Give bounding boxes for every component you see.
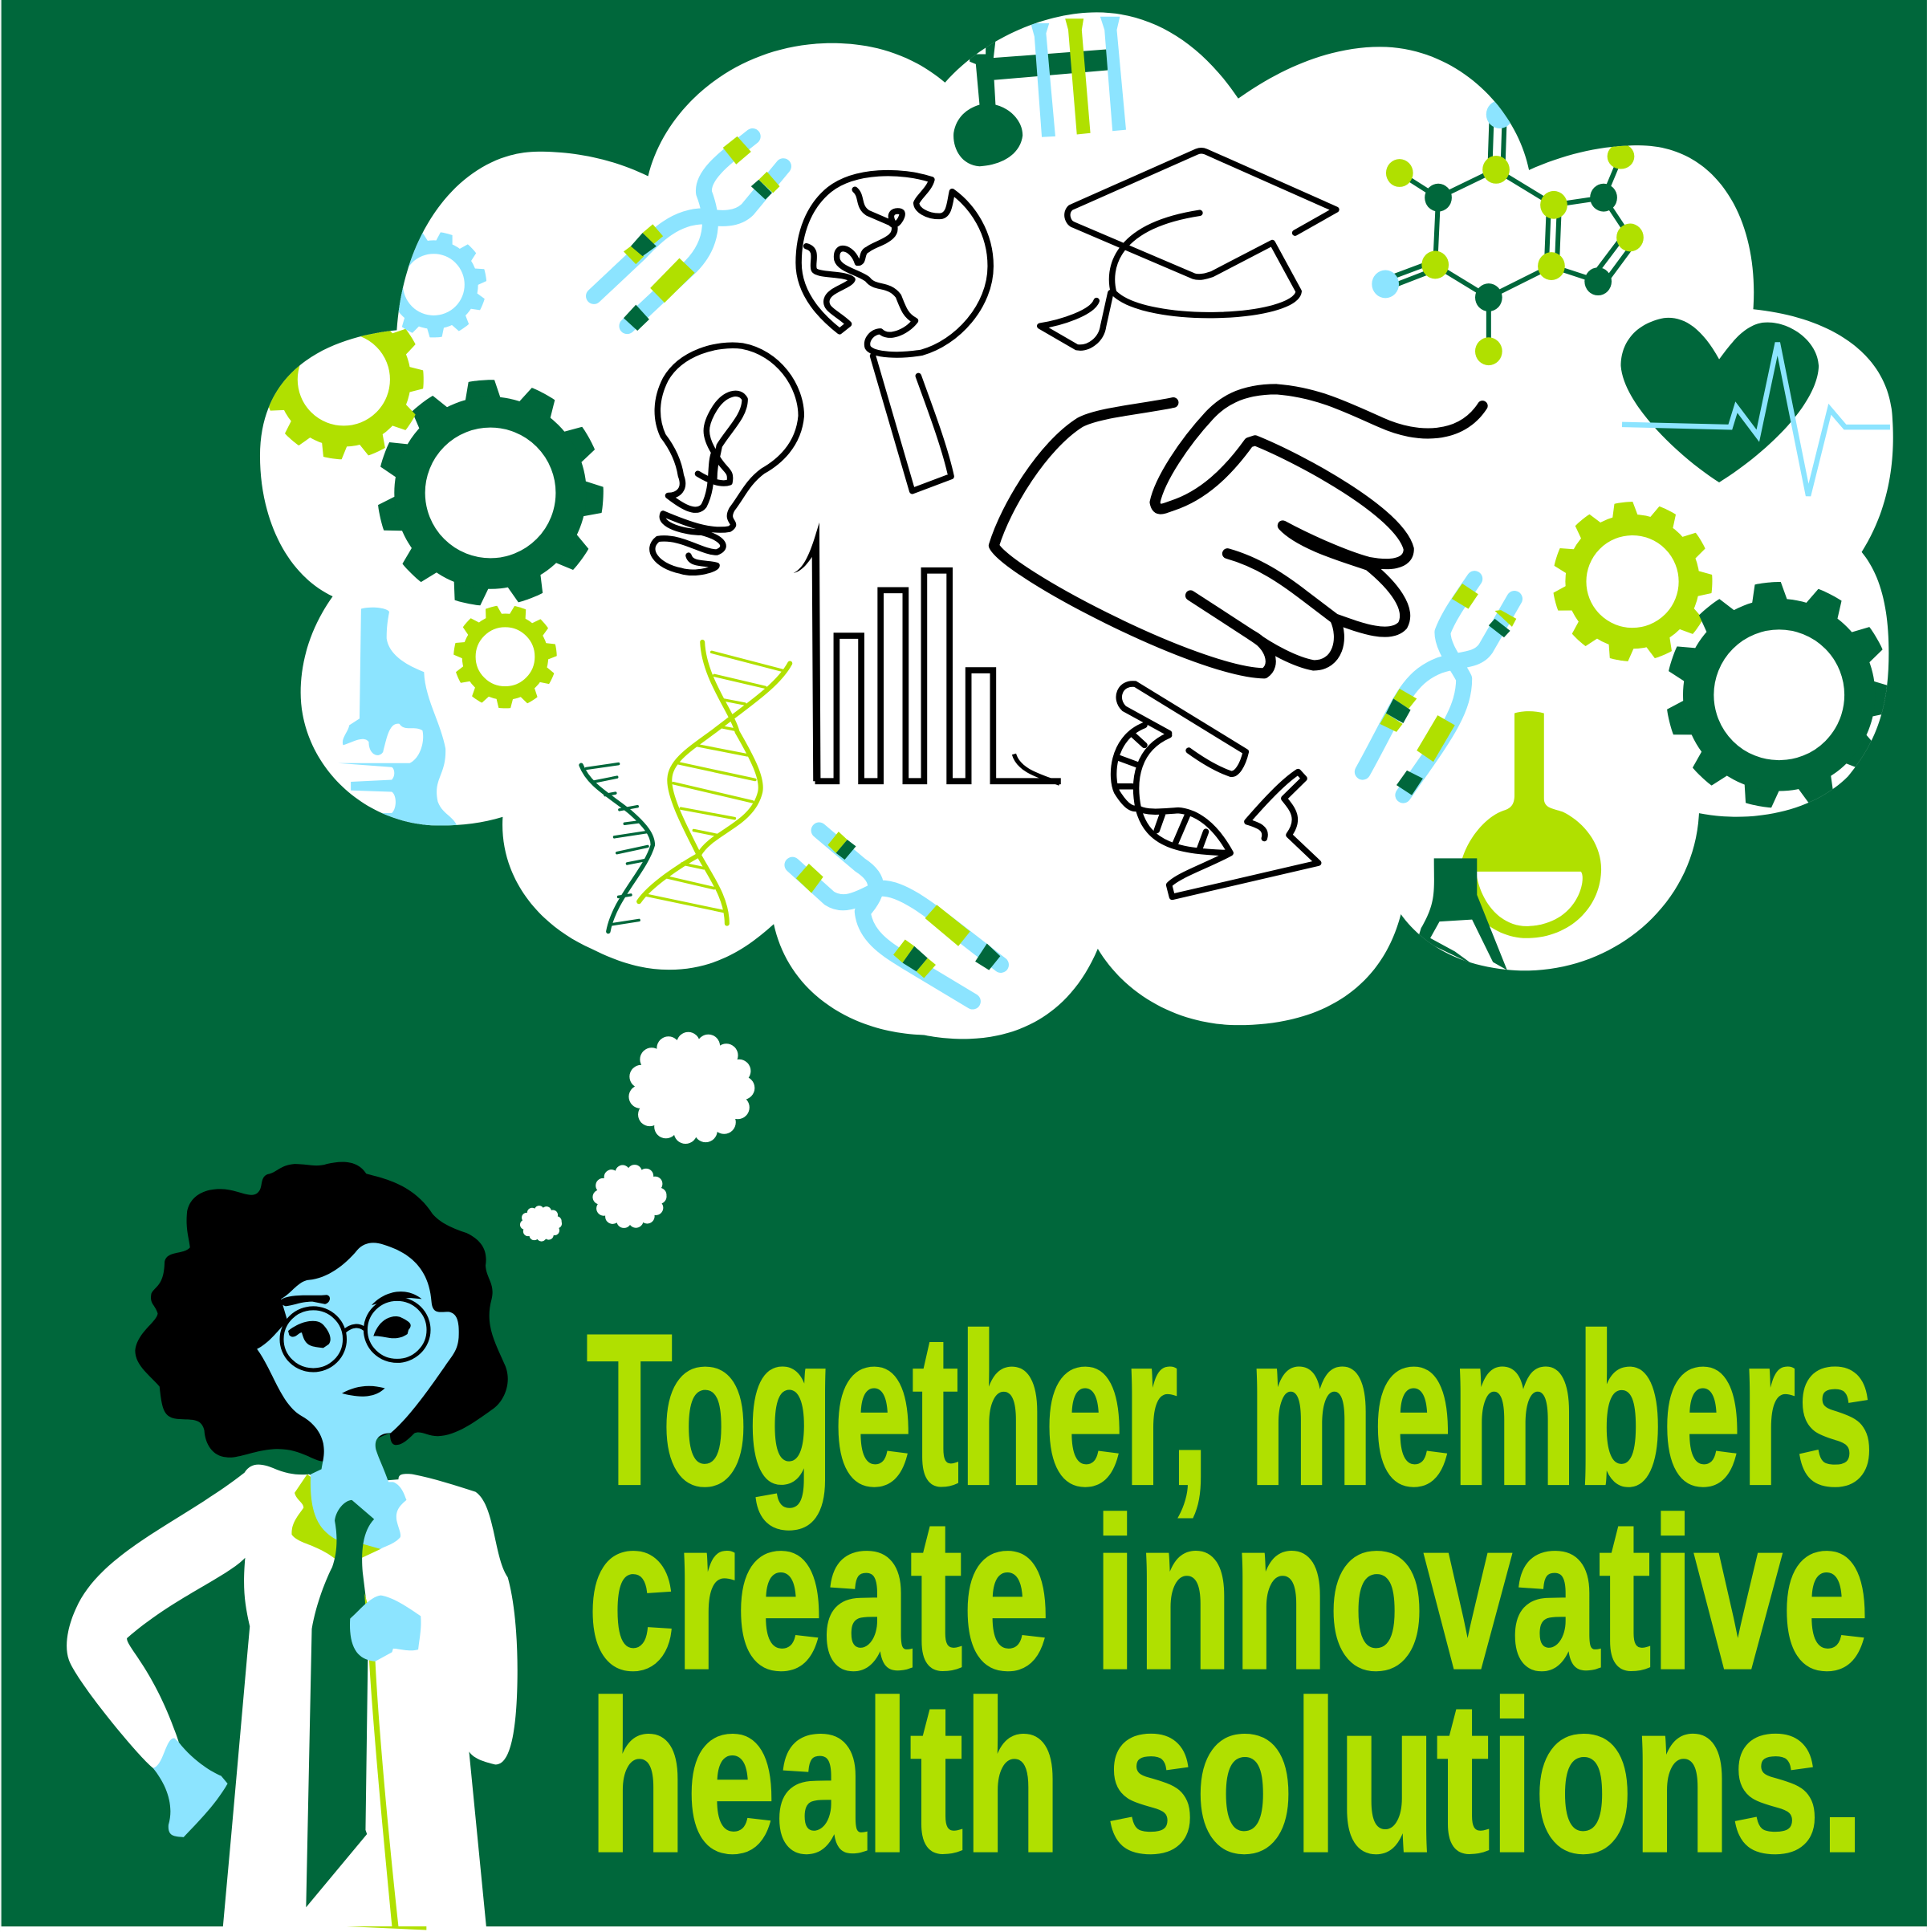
icon: lime DNA helix (639, 642, 790, 924)
icon: light bulb (652, 345, 801, 572)
glasses (282, 1299, 429, 1370)
icon: microscope (1114, 684, 1319, 897)
scientist character (67, 1162, 518, 1930)
lime stripe on coat (347, 1592, 426, 1930)
icon: chromosome right (1363, 579, 1516, 795)
icon: chromosome top left (594, 136, 783, 331)
icon: handshake (994, 389, 1482, 673)
icon: dark gear right (1667, 582, 1888, 807)
tie (306, 1500, 374, 1907)
icon: lime gear right (1550, 498, 1714, 665)
icon: lime round flask with stand (1418, 711, 1601, 970)
thought cloud with icons (260, 12, 1897, 1039)
hand on hip (153, 1739, 228, 1837)
icon: heart with ECG line (1620, 318, 1890, 496)
thought bubbles (525, 1043, 743, 1236)
icon: large dark gear left (378, 380, 604, 605)
hand on chest (350, 1596, 421, 1662)
icon: chromosome bottom (792, 831, 1001, 1002)
icon: graduation cap (1040, 151, 1336, 348)
bar chart (794, 523, 1061, 783)
icon: blue flask left (338, 608, 458, 828)
icon: molecule (1372, 100, 1644, 365)
icon: blue gear (398, 232, 486, 337)
headline (587, 1289, 1874, 1897)
lime shirt collar (291, 1474, 406, 1560)
icon: globe with magnifier (799, 173, 990, 491)
icon: small lime gear (453, 605, 557, 708)
face and neck (257, 1243, 459, 1549)
hair (135, 1162, 508, 1462)
icon: lime gear upper left (269, 329, 424, 459)
icon: dark DNA helix (581, 764, 652, 932)
lab coat (67, 1465, 518, 1927)
facial features (280, 1291, 422, 1397)
icon: dark flask and test tubes (953, 17, 1126, 166)
